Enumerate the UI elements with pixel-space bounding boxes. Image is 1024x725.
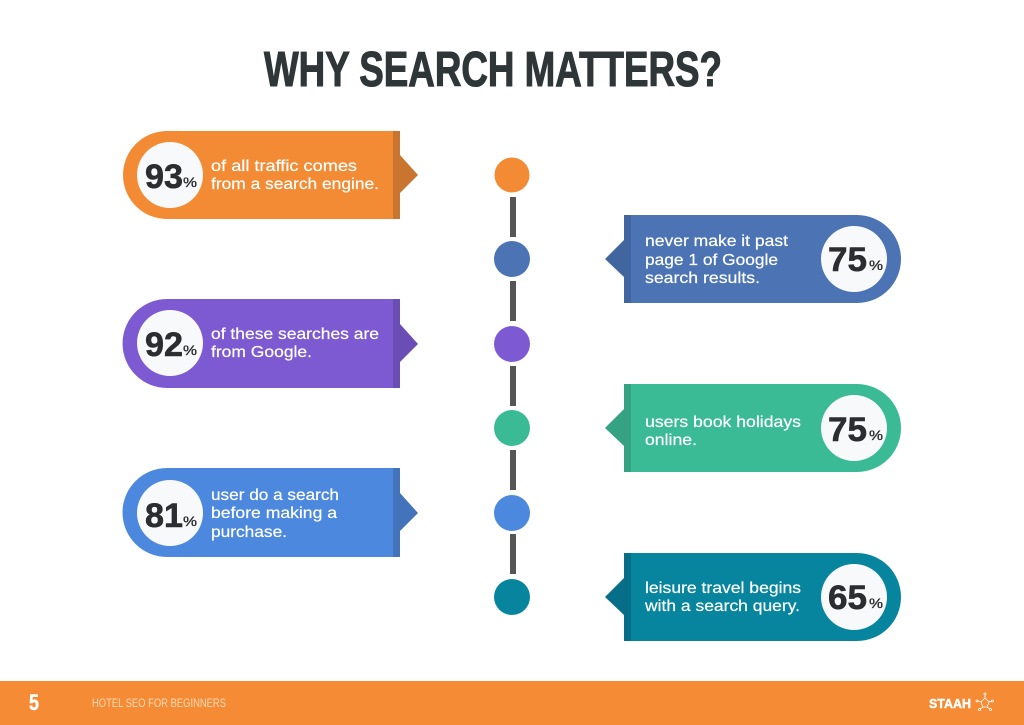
panel: 81% search before purchase: before making a (211, 505, 337, 522)
panel: 93% of all traffic (123, 131, 418, 219)
panel: 81% search before purchase (122, 468, 418, 557)
panel: 81% search before purchase: user do a search (211, 487, 339, 504)
panel: 81% search before purchase: 81 (145, 497, 183, 535)
panel: 93% of all traffic: of all traffic comes (211, 158, 357, 175)
timeline connector lines (510, 197, 516, 574)
panel: 93% of all traffic: 93 (145, 158, 183, 196)
footer title: HOTEL SEO FOR BEGINNERS (92, 696, 226, 710)
timeline dot: teal (494, 579, 530, 615)
panel: 65% leisure travel: with a search query. (644, 598, 800, 615)
panel: 92% from Google: from Google. (211, 344, 312, 361)
panel: 93% of all traffic: from a search engine. (211, 176, 379, 193)
panel: 75% book holidays (605, 384, 901, 472)
panel: 75% book holidays: 75 (828, 411, 867, 449)
panel: 75% page 1 of Google: 75 (828, 241, 867, 279)
panel: 75% page 1 of Google: page 1 of Google (645, 252, 778, 269)
panel: 75% page 1 of Google (605, 215, 901, 303)
timeline dot: steel blue (494, 241, 530, 277)
panel: 92% from Google: % (183, 342, 197, 358)
panel: 65% leisure travel: % (869, 595, 883, 611)
panel: 75% book holidays: users book holidays (645, 414, 801, 431)
panel: 75% page 1 of Google: never make it past (645, 233, 789, 250)
logo wordmark: STAAH (929, 696, 971, 711)
panel: 75% book holidays: % (869, 427, 883, 443)
panel: 65% leisure travel: 65 (828, 579, 867, 617)
panel: 75% page 1 of Google: % (869, 257, 883, 273)
icon: logo star network (976, 693, 994, 710)
panel: 75% page 1 of Google: search results. (645, 270, 760, 287)
page number: 5 (29, 690, 39, 715)
panel: 75% book holidays: online. (645, 432, 697, 449)
timeline dot: orange (494, 158, 530, 192)
title: WHY SEARCH MATTERS? (264, 43, 722, 97)
panel: 81% search before purchase: % (183, 513, 197, 529)
panel: 93% of all traffic: % (183, 174, 197, 190)
panel: 92% from Google (123, 299, 418, 388)
panel: 81% search before purchase: purchase. (211, 524, 287, 541)
timeline dot: green (494, 410, 530, 446)
timeline dot: blue (494, 495, 530, 531)
panel: 92% from Google: of these searches are (211, 326, 379, 343)
panel: 65% leisure travel (605, 553, 901, 641)
footer bar (0, 681, 1024, 725)
panel: 65% leisure travel: leisure travel begins (645, 580, 801, 597)
timeline dot: purple (494, 326, 530, 362)
panel: 92% from Google: 92 (145, 326, 183, 364)
